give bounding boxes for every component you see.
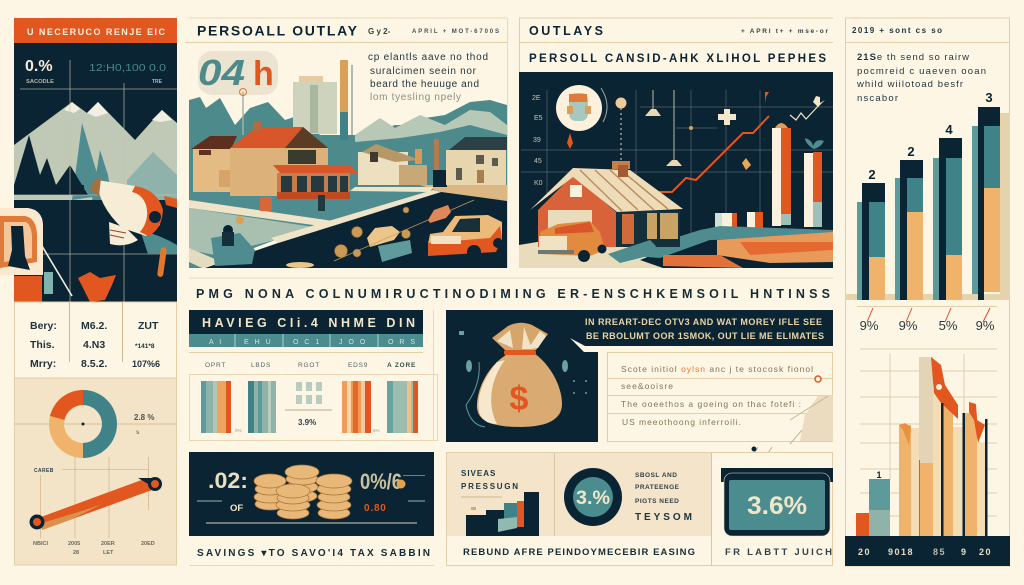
small labels: 6% bbox=[373, 428, 380, 433]
banner: A I bbox=[209, 339, 223, 346]
big number badge: 04 bbox=[198, 52, 245, 93]
heading: G y 2- bbox=[368, 27, 391, 36]
text block: cp elantls aave no thod bbox=[368, 52, 488, 63]
caption right: FR LABTT JUICH bbox=[725, 547, 832, 558]
blue path bbox=[608, 240, 660, 263]
text lines: US meeothoong inferroili. bbox=[622, 417, 741, 427]
strip chart 4 bbox=[387, 381, 418, 433]
panel: money bag bbox=[446, 310, 833, 442]
panel: coins bbox=[189, 452, 434, 536]
bar chart: lower bbox=[856, 357, 988, 536]
line chart: arrow: 28 bbox=[73, 550, 79, 556]
donut label bbox=[134, 413, 154, 436]
banner: O R S bbox=[388, 339, 417, 346]
text lines bbox=[621, 364, 813, 427]
axis band: 20 bbox=[979, 547, 992, 557]
stat: percent: SACODLE bbox=[26, 79, 55, 85]
panel: left column top bbox=[0, 18, 177, 302]
big number badge: h bbox=[253, 55, 274, 93]
text block: beard the heuuge and bbox=[370, 79, 479, 90]
percent labels: 5% bbox=[939, 318, 958, 333]
heading bbox=[519, 18, 833, 72]
axis band: 20 bbox=[858, 547, 871, 557]
bar chart: stacked: 2 bbox=[868, 167, 876, 182]
stat: amount bbox=[89, 62, 166, 85]
marker bbox=[815, 376, 821, 382]
text block: suralcimen seein nor bbox=[370, 66, 477, 77]
heading: APRIL + MOT-6700S bbox=[412, 29, 499, 35]
small labels bbox=[235, 428, 380, 433]
sub-panel: rate dial bbox=[564, 468, 622, 526]
bar chart: lower: 1 bbox=[876, 470, 882, 480]
column labels: RGOT bbox=[298, 362, 320, 369]
illustration: truck bbox=[538, 221, 606, 262]
stat left: OF bbox=[230, 503, 243, 514]
column labels: A ZORE bbox=[387, 362, 416, 369]
device: rate display bbox=[721, 468, 833, 536]
percent labels bbox=[857, 306, 997, 333]
illustration: mountains and sky bbox=[189, 97, 507, 200]
stat: amount: TRE bbox=[152, 79, 163, 85]
line chart: arrow bbox=[30, 457, 162, 556]
axis labels: 39 bbox=[533, 137, 541, 144]
table: left column stats: 4.N3 bbox=[83, 339, 105, 351]
banner: J O O bbox=[339, 339, 367, 346]
text block: whild wiilotoad besfr bbox=[856, 79, 963, 90]
panel: personal outlay bbox=[185, 18, 508, 268]
strip chart 2 bbox=[248, 381, 276, 433]
device: rate display: 3.6% bbox=[747, 492, 807, 520]
heading: 2019 + sont cs so bbox=[852, 26, 942, 35]
table: left column stats: *141*8 bbox=[135, 343, 155, 350]
illustration: small cars and coins bbox=[211, 195, 474, 268]
caption: REBUND AFRE PEINDOYMECEBIR EASING bbox=[463, 547, 695, 558]
text block bbox=[368, 52, 488, 103]
bar chart: stacked: 2 bbox=[907, 144, 915, 159]
table: left column stats: M6.2. bbox=[81, 320, 107, 332]
heading: PERSOALL OUTLAY bbox=[197, 22, 358, 38]
decorative drops bbox=[459, 331, 587, 394]
line chart: arrow: 20ED bbox=[141, 541, 155, 547]
small labels: 0% bbox=[235, 428, 242, 433]
illustration: pickup truck bbox=[428, 215, 503, 259]
axis labels: 2E bbox=[532, 95, 541, 102]
stat: percent bbox=[25, 58, 55, 85]
stat left: .02: bbox=[208, 468, 248, 493]
text block: pocmreid c uaeven ooan bbox=[857, 66, 986, 77]
line chart: arrow: CAREB bbox=[34, 468, 54, 474]
stat right: 0.80 bbox=[364, 503, 387, 514]
header banner: U NECERUCO RENJE EIC bbox=[27, 27, 166, 37]
icon: portrait circle bbox=[556, 85, 607, 131]
decorative tan shape bbox=[800, 395, 833, 441]
table: left column stats: 8.5.2. bbox=[81, 358, 107, 370]
axis labels: E5 bbox=[534, 115, 543, 122]
table: left column stats: Mrry: bbox=[30, 358, 56, 370]
line chart: arrow: NBICI bbox=[33, 541, 48, 547]
axis band: 85 bbox=[933, 547, 946, 557]
table: left column stats: This. bbox=[30, 339, 55, 351]
sub-panel: rate notes bbox=[635, 472, 692, 523]
bar chart: stacked: 4 bbox=[945, 122, 953, 137]
banner: O C 1 bbox=[293, 339, 321, 346]
axis band: 9 bbox=[961, 547, 966, 557]
stat: amount: 12:H0,100 0.0 bbox=[89, 62, 166, 74]
table: left column stats: ZUT bbox=[138, 320, 159, 332]
line chart: arrow: 20ER bbox=[101, 541, 115, 547]
headline text: IN RREART-DEC OTV3 AND WAT MOREY IFLE SEE bbox=[585, 317, 822, 327]
ground shapes bbox=[519, 226, 833, 268]
section heading: PMG NONA COLNUMIRUCTINODIMING ER-ENSCHKEMSOIL HNTINSS bbox=[196, 287, 830, 301]
panel: right column bars bbox=[845, 18, 1010, 566]
icon: money bag: $ bbox=[510, 380, 529, 418]
sub-panel: rate notes: PIGTS NEED bbox=[635, 498, 679, 505]
text block: lom tyesling npely bbox=[370, 92, 461, 103]
column labels: EDS9 bbox=[348, 362, 368, 369]
column labels: OPRT bbox=[205, 362, 226, 369]
icon: orange figure bbox=[42, 246, 116, 302]
text lines: see&ooisre bbox=[621, 381, 673, 391]
axis band: 9018 bbox=[888, 547, 914, 557]
icon grid and value bbox=[285, 382, 332, 427]
panel: category strips bbox=[189, 310, 438, 441]
percent labels: 9% bbox=[899, 318, 918, 333]
text block: 21Se th send so rairw bbox=[857, 52, 969, 63]
strip chart 1 bbox=[201, 381, 231, 433]
table: left column stats: 107%6 bbox=[132, 359, 160, 369]
grid lines bbox=[521, 90, 833, 235]
line chart: arrow: LET bbox=[103, 550, 114, 556]
orange wedge bbox=[14, 276, 42, 302]
text block bbox=[856, 52, 986, 104]
sub-panel: pressure steps bbox=[461, 469, 539, 536]
icon: money bag bbox=[477, 323, 562, 427]
stat left bbox=[197, 468, 248, 514]
bar chart: small and tall bars bbox=[715, 123, 824, 234]
icon: coin stacks bbox=[254, 465, 352, 519]
inset: portrait card bbox=[0, 208, 43, 275]
heading bbox=[185, 18, 508, 268]
connector lines bbox=[745, 396, 828, 468]
axis labels bbox=[532, 95, 543, 187]
sub-panel: pressure steps: SIVEAS bbox=[461, 469, 496, 478]
table: left column stats bbox=[14, 302, 176, 378]
illustration: left house bbox=[191, 136, 237, 192]
text block: nscabor bbox=[857, 93, 898, 104]
percent labels: 9% bbox=[860, 318, 879, 333]
heading: PERSOLL CANSID-AHK XLIHOL PEPHES bbox=[529, 53, 826, 65]
lamps and icons bbox=[567, 90, 825, 170]
banner: E H U bbox=[244, 339, 273, 346]
axis band bbox=[845, 536, 1010, 566]
sub-panel: rate dial: 3.% bbox=[576, 488, 610, 509]
strip chart 3 bbox=[342, 381, 371, 433]
panel: pressure and rate bbox=[446, 452, 833, 566]
illustration: middle house bbox=[358, 139, 447, 187]
coins caption: SAVINGS ▾TO SAVO'I4 TAX SABBIN bbox=[197, 548, 430, 559]
heading: OUTLAYS bbox=[529, 24, 603, 38]
icon: megaphone bbox=[90, 178, 177, 277]
percent labels: 9% bbox=[976, 318, 995, 333]
illustration: mountains bbox=[14, 102, 177, 200]
grid lines bbox=[14, 60, 177, 302]
column labels: LBDS bbox=[251, 362, 271, 369]
bar chart: stacked bbox=[845, 90, 1010, 300]
grid lines bbox=[860, 349, 997, 516]
marker dot bbox=[752, 446, 756, 452]
stat right bbox=[360, 469, 425, 514]
illustration: main house bbox=[230, 122, 358, 199]
sub-panel: rate notes: TEYSOM bbox=[635, 512, 692, 523]
donut label: 2.8 % bbox=[134, 413, 154, 422]
illustration: tower bbox=[240, 60, 352, 140]
panel: outlays bbox=[519, 18, 833, 268]
illustration: house with garage bbox=[530, 161, 683, 247]
headline text: BE RBOLUMT OOR 1SMOK, OUT LIE ME ELIMATES bbox=[586, 331, 824, 341]
sub-panel: pressure steps: PRESSUGN bbox=[461, 482, 518, 491]
table: left column stats: Bery: bbox=[30, 320, 57, 332]
column labels bbox=[205, 362, 416, 369]
headline text bbox=[585, 317, 824, 341]
panel: donut and arrow chart bbox=[14, 378, 177, 565]
stat: percent: 0.% bbox=[25, 58, 53, 75]
donut chart bbox=[49, 390, 117, 458]
line chart: arrow: 2005 bbox=[68, 541, 80, 547]
banner bbox=[189, 310, 423, 347]
bar chart: stacked: 3 bbox=[985, 90, 993, 105]
banner: HAVIEG CIi.4 NHME DIN bbox=[202, 316, 415, 330]
illustration: road bbox=[205, 192, 507, 268]
text lines: Scote initiol oylsn anc j te stocosk fionol bbox=[621, 364, 813, 374]
panel: notes text bbox=[607, 352, 833, 468]
ground bbox=[189, 187, 507, 268]
axis labels: K0 bbox=[534, 180, 543, 187]
header banner bbox=[14, 18, 177, 43]
icon grid and value: 3.9% bbox=[298, 418, 316, 427]
axis labels: 45 bbox=[534, 158, 542, 165]
stat right: 0%/6 bbox=[360, 469, 402, 494]
sub-panel: rate notes: PRATEENGE bbox=[635, 484, 680, 491]
text lines: The ooeethos a goeing on thac fotefi : bbox=[621, 399, 801, 409]
sub-panel: rate notes: SBOSL AND bbox=[635, 472, 677, 479]
donut label: s bbox=[136, 430, 140, 436]
big number badge bbox=[198, 51, 278, 95]
heading: + APRI t+ + mse-or bbox=[741, 28, 828, 35]
line chart: rising trend bbox=[638, 116, 769, 192]
illustration: right house bbox=[446, 137, 507, 185]
